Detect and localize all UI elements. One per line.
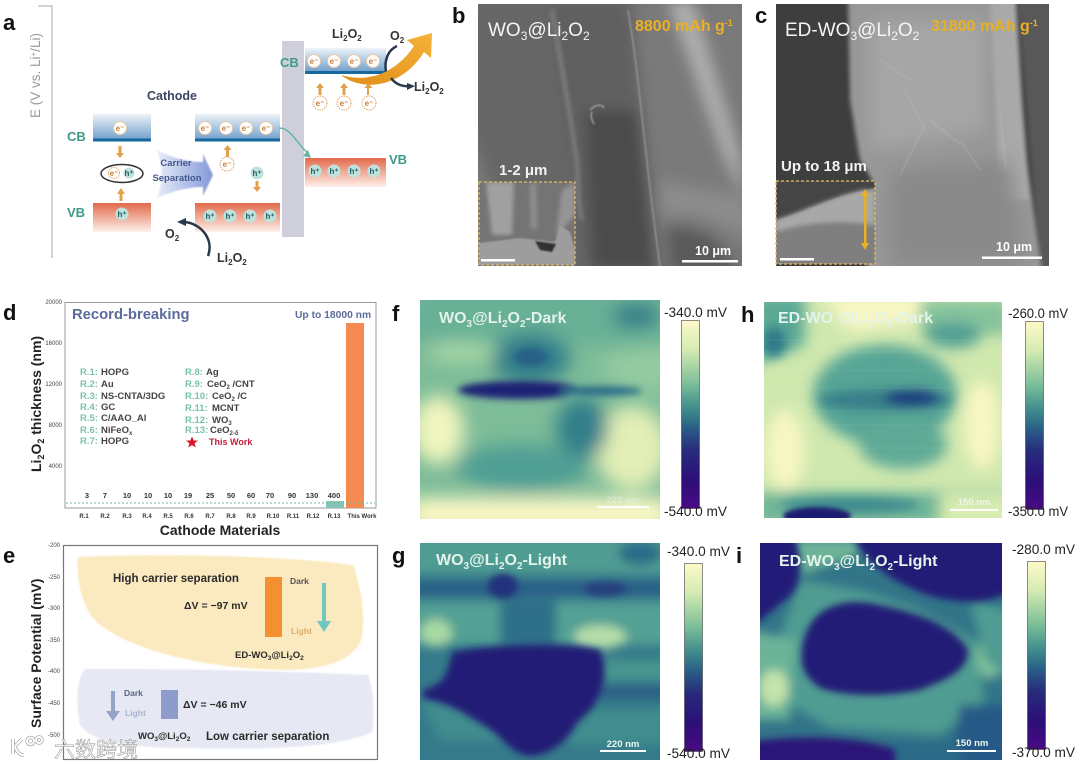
title b: @Li (527, 20, 561, 41)
panel letter c: c (755, 3, 767, 28)
legend column 1: R.6: (80, 425, 98, 436)
legend column 2 (185, 367, 255, 437)
colorbar h: -350.0 mV (1008, 503, 1069, 519)
transfer arrow (279, 128, 311, 158)
inset scale bar c (780, 258, 814, 260)
discharge reaction bottom: 2 (228, 258, 233, 267)
SEM image b (470, 0, 750, 270)
legend column 2: /CNT (230, 379, 255, 390)
legend column 2: R.11: (185, 403, 208, 414)
watermark (13, 737, 138, 762)
energy axis: E (V vs. Li (28, 56, 43, 118)
legend column 2: MCNT (212, 403, 240, 414)
scale bar f: 220 nm (607, 495, 639, 506)
bar: R.13 (326, 501, 344, 508)
title i: 2 (870, 562, 876, 573)
x labels: R.4 (142, 514, 152, 520)
middle band pair: h⁺ (252, 169, 262, 178)
title i: O (875, 553, 888, 570)
title c: O (898, 20, 913, 41)
legend column 2: R.10: (185, 391, 208, 402)
title b: 2 (561, 29, 568, 43)
y axis title: O (28, 444, 44, 455)
charge reaction top (332, 27, 444, 96)
title i: 2 (888, 562, 894, 573)
y ticks: -350 (48, 638, 61, 644)
title g: O (504, 552, 517, 569)
panel f: potential map dark (392, 290, 728, 530)
WO3 label: 2 (187, 736, 191, 743)
scale bar b: 10 μm (695, 244, 731, 258)
inset scale bar b (481, 259, 515, 262)
scale bar c (982, 240, 1042, 259)
x labels: R.10 (267, 514, 280, 520)
y ticks: 16000 (45, 341, 63, 347)
separator bar (282, 41, 304, 237)
ED label: O (293, 650, 300, 661)
title h: -Dark (892, 310, 933, 327)
value labels: 25 (206, 491, 214, 500)
panel b: SEM WO3@Li2O2 (452, 0, 750, 270)
title c: 2 (913, 29, 920, 43)
y ticks: -450 (48, 701, 61, 707)
discharge reaction bottom (165, 218, 247, 267)
WO3 label: @Li (158, 731, 176, 742)
inset frame b (479, 182, 575, 265)
title c: ED-WO (785, 20, 850, 41)
colorbar f (664, 304, 728, 519)
legend column 1: R.2: (80, 379, 98, 390)
dark label low: Dark (124, 688, 143, 698)
title i: 3 (834, 562, 840, 573)
ED label: ED-WO (235, 650, 268, 661)
legend column 2: CeO (210, 425, 230, 436)
x labels: R.11 (287, 514, 300, 520)
title f: 3 (467, 319, 473, 330)
scale bar h: 150 nm (958, 497, 990, 508)
y ticks (45, 300, 63, 470)
WO3 label: 3 (154, 736, 158, 743)
title i: ED-WO (779, 553, 834, 570)
title i: -Light (893, 553, 938, 570)
title h: @Li (839, 310, 868, 327)
value labels: 10 (123, 491, 131, 500)
right CB band: e⁻ (369, 57, 377, 66)
WO3 label: WO (138, 731, 154, 742)
discharge reaction bottom: Li (217, 251, 228, 265)
right CB band: e⁻ (310, 57, 318, 66)
panel d: bar chart (3, 300, 377, 538)
middle band pair: e⁻ (223, 160, 231, 169)
right VB band: h⁺ (310, 167, 320, 176)
title h: O (874, 310, 887, 327)
bar: this work (346, 323, 364, 508)
panel e: surface potential (3, 543, 378, 762)
carrier separation arrow: Carrier (160, 158, 192, 169)
map f (420, 300, 660, 519)
middle band pair: h⁺ (245, 212, 255, 221)
scale bar c: 10 μm (996, 240, 1032, 254)
left band pair: h⁺ (117, 210, 127, 219)
title h: ED-WO (778, 310, 833, 327)
WO3 label: 2 (176, 736, 180, 743)
legend column 2: 2 (227, 385, 231, 391)
x labels: R.1 (79, 514, 89, 520)
y ticks: -250 (48, 575, 61, 581)
panel letter e: e (3, 543, 15, 568)
right VB band: VB (389, 152, 407, 167)
panel letter g: g (392, 543, 405, 568)
x labels: R.9 (246, 514, 256, 520)
plot frame (65, 302, 376, 508)
y axis title: 2 (36, 439, 46, 444)
legend column 2: R.13: (185, 425, 208, 436)
left band pair: CB (67, 129, 86, 144)
title c: @Li (857, 20, 891, 41)
scale bar f (597, 495, 649, 508)
scale bar h (950, 497, 998, 511)
inset image c (776, 181, 875, 264)
scale bar g (600, 739, 646, 752)
ED label: 3 (268, 655, 272, 662)
value labels: 10 (164, 491, 172, 500)
title f: O (508, 310, 520, 327)
carrier separation arrow (152, 150, 213, 198)
low separation region (77, 669, 374, 749)
legend column 2: 3 (228, 421, 232, 427)
panel c: SEM ED-WO3@Li2O2 (755, 0, 1055, 270)
SEM image c (776, 0, 1055, 270)
map i (760, 543, 1002, 760)
panel letter d: d (3, 300, 16, 325)
energy axis: /Li) (28, 33, 43, 52)
title g: 3 (464, 561, 470, 572)
y axis title: Surface Potential (mV) (28, 579, 44, 728)
orange bar (265, 577, 282, 637)
right CB band: e⁻ (365, 99, 373, 108)
x labels: R.8 (226, 514, 236, 520)
y ticks: 20000 (45, 300, 63, 306)
value labels: 3 (85, 491, 89, 500)
legend column 1: GC (101, 402, 115, 413)
high carrier text: High carrier separation (113, 573, 239, 585)
y axis title: 2 (36, 455, 46, 460)
right CB band (280, 48, 386, 110)
panel h: potential map dark (741, 295, 1069, 525)
value labels: 90 (288, 491, 296, 500)
frame (64, 546, 378, 760)
x labels: This Work (348, 514, 377, 520)
middle band pair: h⁺ (265, 212, 275, 221)
x axis title: Cathode Materials (160, 522, 281, 538)
discharge reaction bottom: 2 (242, 258, 247, 267)
left band pair: h⁺ (124, 169, 134, 178)
colorbar f: -540.0 mV (664, 503, 728, 519)
scale bar i: 150 nm (956, 738, 988, 749)
panel letter a: a (3, 10, 16, 35)
reference line (66, 502, 375, 504)
x labels: R.5 (163, 514, 173, 520)
colorbar i: -280.0 mV (1012, 541, 1076, 557)
left band pair: e⁻ (116, 124, 124, 133)
title f: 2 (520, 319, 526, 330)
charge reaction top: 2 (425, 87, 430, 96)
middle band pair: e⁻ (262, 124, 270, 133)
value labels: 50 (227, 491, 235, 500)
title g: 2 (517, 561, 523, 572)
blue arrow (106, 691, 120, 721)
discharge reaction bottom: O (165, 227, 175, 241)
this work legend (186, 436, 253, 448)
this work legend: This Work (209, 437, 253, 447)
title f: @Li (472, 310, 502, 327)
delta V low: ΔV = −46 mV (183, 699, 247, 711)
charge reaction top: Li (414, 80, 425, 94)
title g: WO (436, 552, 464, 569)
capacity b: 8800 mAh g (635, 18, 725, 35)
discharge reaction bottom: 2 (175, 234, 180, 243)
energy axis (28, 6, 52, 258)
middle band pair: h⁺ (205, 212, 215, 221)
scale bar b (682, 244, 738, 262)
left band pair: VB (67, 205, 85, 220)
title h: 2 (887, 319, 893, 330)
charge reaction top: 2 (400, 36, 405, 45)
dark label: Dark (290, 576, 309, 586)
inset caption b: 1-2 μm (499, 162, 547, 179)
panel a: energy band diagram (3, 6, 444, 267)
charge reaction top: 2 (343, 34, 348, 43)
cathode label: Cathode (147, 89, 197, 103)
left band pair: e⁻ (110, 169, 118, 178)
title i: @Li (840, 553, 870, 570)
right CB band: e⁻ (316, 99, 324, 108)
middle band pair: e⁻ (222, 124, 230, 133)
x labels: R.2 (100, 514, 110, 520)
inset frame c (776, 181, 875, 264)
legend column 1: HOPG (101, 436, 129, 447)
middle band pair (195, 114, 280, 232)
title g: 2 (499, 561, 505, 572)
colorbar i (1012, 541, 1076, 760)
scale bar i (947, 738, 996, 752)
title b: O (568, 20, 583, 41)
value labels: 7 (103, 491, 107, 500)
title c: 3 (850, 29, 857, 43)
teal arrow (317, 583, 331, 632)
title f: 2 (502, 319, 508, 330)
value labels: 400 (328, 491, 340, 500)
high separation region (78, 555, 363, 670)
y ticks: 8000 (49, 423, 63, 429)
right CB band: CB (280, 55, 299, 70)
middle band pair: h⁺ (225, 212, 235, 221)
value labels: 10 (144, 491, 152, 500)
panel g: potential map light (392, 535, 731, 761)
title b: WO (488, 20, 521, 41)
legend column 2: 2-δ (230, 431, 239, 437)
light label low: Light (125, 708, 146, 718)
title c: 2 (891, 29, 898, 43)
low carrier text: Low carrier separation (206, 731, 329, 743)
legend column 2: /C (235, 391, 247, 402)
y ticks (48, 543, 61, 739)
legend column 1: C/AAO_Al (101, 413, 146, 424)
WO3 label: O (179, 731, 187, 742)
x labels: R.6 (184, 514, 194, 520)
ED label: 2 (300, 655, 304, 662)
legend column 2: CeO (207, 379, 227, 390)
colorbar g (667, 543, 731, 761)
colorbar f: -340.0 mV (664, 304, 728, 320)
value labels: 70 (266, 491, 274, 500)
charge reaction top: 2 (439, 87, 444, 96)
x labels: R.3 (122, 514, 132, 520)
right CB band: e⁻ (330, 57, 338, 66)
carrier separation arrow: Separation (152, 173, 202, 184)
panel letter b: b (452, 3, 465, 28)
x labels: R.7 (205, 514, 215, 520)
right VB band (305, 152, 407, 187)
legend column 1: Au (101, 379, 114, 390)
x labels: R.12 (307, 514, 320, 520)
legend column 1 (80, 367, 165, 447)
chart heading: Record-breaking (72, 307, 190, 323)
watermark: 六数跨境 (54, 739, 138, 762)
charge reaction top: Li (332, 27, 343, 41)
right VB band: h⁺ (329, 167, 339, 176)
middle band pair: e⁻ (201, 124, 209, 133)
inset caption c: Up to 18 μm (781, 158, 867, 175)
colorbar h: -260.0 mV (1008, 305, 1069, 321)
title h: 3 (833, 319, 839, 330)
colorbar h (1008, 305, 1069, 519)
title f: -Dark (526, 310, 567, 327)
colorbar i: -370.0 mV (1012, 744, 1076, 760)
panel letter i: i (736, 543, 742, 568)
left band pair (67, 114, 151, 232)
map h (764, 302, 1002, 518)
inset image b (479, 182, 575, 265)
legend column 2: CeO (212, 391, 232, 402)
x labels: R.13 (328, 514, 341, 520)
legend column 1: HOPG (101, 367, 129, 378)
discharge reaction bottom: O (233, 251, 243, 265)
value labels: 60 (247, 491, 255, 500)
colorbar g: -340.0 mV (667, 543, 731, 559)
title g: -Light (523, 552, 568, 569)
blue bar (161, 690, 178, 719)
title f: WO (439, 310, 467, 327)
title b: 3 (521, 29, 528, 43)
legend column 1: R.7: (80, 436, 98, 447)
ED label: @Li (271, 650, 289, 661)
title h: 2 (868, 319, 874, 330)
middle band pair: e⁻ (242, 124, 250, 133)
x labels (79, 514, 377, 520)
legend column 2: WO (212, 415, 228, 426)
y ticks: -500 (48, 733, 61, 739)
legend column 1: NS-CNTA/3DG (101, 391, 165, 402)
y axis title: thickness (nm) (28, 336, 44, 439)
delta V high: ΔV = −97 mV (184, 600, 248, 612)
legend column 1: R.4: (80, 402, 98, 413)
title g: @Li (469, 552, 499, 569)
legend column 1: R.3: (80, 391, 98, 402)
legend column 1: x (129, 431, 133, 437)
legend column 2: R.9: (185, 379, 203, 390)
legend column 2: Ag (206, 367, 219, 378)
capacity c: -1 (1030, 18, 1038, 28)
panel letter h: h (741, 302, 754, 327)
light label: Light (291, 626, 312, 636)
bar callout: Up to 18000 nm (295, 310, 371, 321)
thickness arrow (861, 189, 869, 250)
energy axis: + (29, 51, 38, 56)
charge reaction top: O (390, 29, 400, 43)
value labels: 19 (184, 491, 192, 500)
map g (420, 543, 660, 760)
charge reaction top: 2 (357, 34, 362, 43)
y ticks: -200 (48, 543, 61, 549)
ED label: 2 (289, 655, 293, 662)
panel i: potential map light (736, 535, 1076, 764)
capacity c: 31800 mAh g (931, 18, 1030, 35)
y ticks: 12000 (45, 382, 63, 388)
charge reaction top: O (430, 80, 440, 94)
right CB band: e⁻ (340, 99, 348, 108)
y ticks: 4000 (49, 464, 63, 470)
value labels: 130 (306, 491, 318, 500)
title b: 2 (583, 29, 590, 43)
charge reaction top: O (348, 27, 358, 41)
right CB band: e⁻ (350, 57, 358, 66)
y ticks: -300 (48, 606, 61, 612)
y ticks: -400 (48, 669, 61, 675)
scale bar g: 220 nm (607, 739, 639, 750)
legend column 1: R.1: (80, 367, 98, 378)
right VB band: h⁺ (349, 167, 359, 176)
legend column 1: NiFeO (101, 425, 129, 436)
legend column 2: 2 (232, 397, 236, 403)
y axis title: Li (28, 460, 44, 472)
colorbar g: -540.0 mV (667, 745, 731, 761)
capacity b: -1 (725, 18, 733, 28)
legend column 1: R.5: (80, 413, 98, 424)
panel letter f: f (392, 301, 400, 326)
legend column 2: R.8: (185, 367, 203, 378)
legend column 2: R.12: (185, 415, 208, 426)
right VB band: h⁺ (369, 167, 379, 176)
value labels (85, 491, 340, 500)
